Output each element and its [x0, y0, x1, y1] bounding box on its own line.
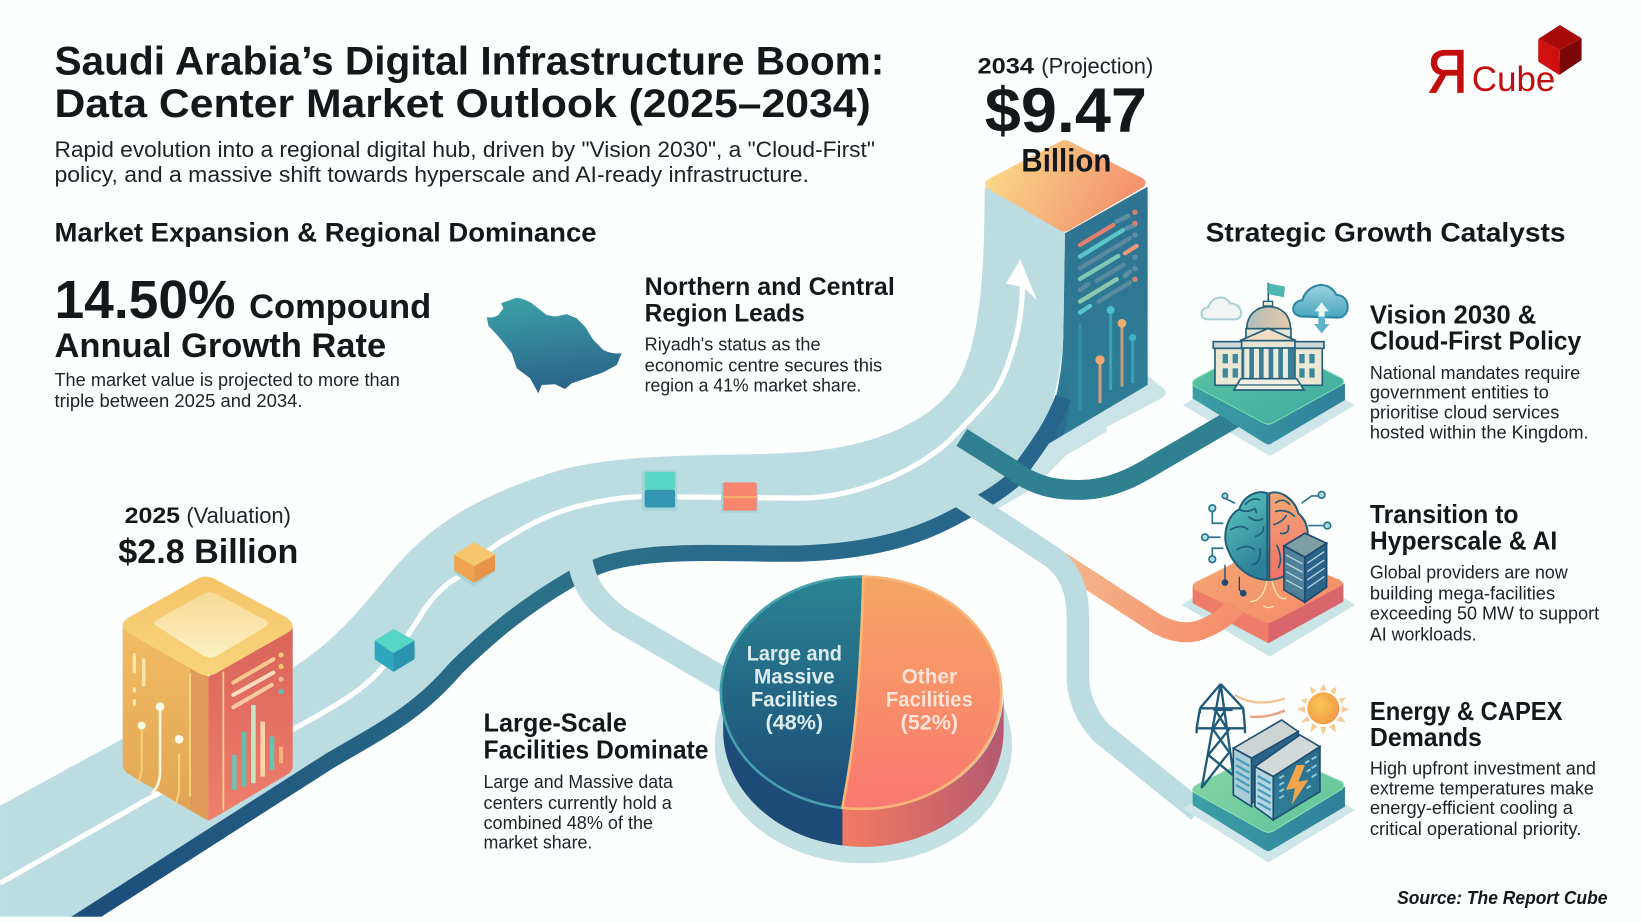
road ribbon beside dark strip	[988, 410, 1107, 508]
text: vision 2030: hosted within the Kingdom.	[1370, 421, 1589, 442]
pie label: other facilities	[886, 665, 973, 734]
text: hyperscale and AI: Transition to	[1370, 499, 1519, 529]
shadow: server tower base	[1013, 375, 1165, 453]
label: 2025 valuation: (Valuation)	[186, 503, 291, 528]
pie label: other facilities: Other	[902, 665, 957, 688]
text: CAGR description: The market value is projected to more than	[54, 369, 400, 390]
callout: northern and central region: economic centre secures this	[645, 355, 882, 376]
pie label: other facilities: (52%)	[901, 711, 958, 734]
text: energy and capex: Demands	[1370, 722, 1482, 752]
label: 2025 valuation: 2025	[125, 503, 180, 528]
label: 2034 projection: (Projection)	[1041, 53, 1153, 78]
text: hyperscale and AI: building mega-facilities	[1370, 583, 1555, 604]
main growth road	[0, 186, 1065, 921]
callout: northern and central region: Riyadh's status as the	[645, 334, 820, 355]
text: hyperscale and AI: AI workloads.	[1370, 623, 1477, 644]
pie label: large and massive: Massive	[754, 665, 835, 688]
arrow: orange link to hyperscale	[1052, 556, 1235, 632]
text: vision 2030: Vision 2030 &	[1370, 299, 1536, 329]
heading: strategic growth catalysts: Strategic Growth Catalysts	[1206, 218, 1566, 248]
pie label: other facilities: Facilities	[886, 688, 973, 711]
text: energy and capex	[1370, 696, 1596, 839]
text: large-scale facilities	[484, 707, 709, 853]
text: vision 2030: prioritise cloud services	[1370, 402, 1559, 423]
text: large-scale facilities: Large and Massive data	[484, 771, 674, 792]
text: energy and capex: critical operational priority.	[1370, 818, 1581, 839]
label: 2034 projection: 2034	[977, 53, 1035, 78]
subtitle	[54, 137, 875, 187]
callout: northern and central region: region a 41% market share.	[645, 374, 861, 395]
title: Saudi Arabia’s Digital Infrastructure Boom:	[54, 38, 884, 83]
cube: flat teal	[642, 470, 677, 511]
text: energy and capex: energy-efficient cooling a	[1370, 797, 1574, 818]
subtitle: policy, and a massive shift towards hyperscale and AI-ready infrastructure.	[54, 162, 809, 187]
text: vision 2030: government entities to	[1370, 382, 1549, 403]
pie halo	[715, 627, 1012, 863]
title	[54, 38, 884, 126]
bottom edge mask	[0, 917, 1641, 923]
label: 2025 valuation	[118, 503, 298, 571]
logo: Cube	[1472, 60, 1555, 99]
road centre line with arrow	[0, 260, 1037, 883]
title: Data Center Market Outlook (2025–2034)	[54, 81, 871, 126]
text: CAGR description	[54, 369, 400, 411]
icon: vision platform and capitol	[1193, 283, 1348, 444]
text: energy and capex: extreme temperatures make	[1370, 777, 1594, 798]
pie chart	[721, 577, 1004, 847]
arrow: teal link to vision	[962, 417, 1237, 490]
text: vision 2030: Cloud-First Policy	[1370, 326, 1582, 356]
road edge: dark strip	[73, 398, 1063, 923]
text: energy and capex: High upfront investment and	[1370, 757, 1596, 778]
source: Source: The Report Cube	[1397, 887, 1607, 908]
pie label: large and massive: Large and	[747, 642, 842, 665]
text: large-scale facilities: combined 48% of the	[484, 812, 653, 833]
icon: hyperscale and AI platform	[1182, 492, 1355, 657]
text: large-scale facilities: Facilities Dominate	[484, 735, 709, 765]
callout: northern and central region: Region Leads	[645, 299, 805, 327]
text: vision 2030: National mandates require	[1370, 362, 1580, 383]
text: vision 2030	[1370, 299, 1589, 442]
server tower 2034	[980, 140, 1148, 453]
text: energy and capex: Energy & CAPEX	[1370, 696, 1563, 726]
cube: amber	[454, 542, 495, 587]
pie label: large and massive	[747, 642, 842, 734]
logo	[1427, 25, 1582, 106]
callout: northern and central region: Northern and Central	[645, 273, 895, 301]
stat: CAGR: Annual Growth Rate	[54, 327, 386, 365]
text: large-scale facilities: market share.	[484, 832, 592, 853]
arrow: link to pie chart	[579, 555, 733, 685]
stat: CAGR: Compound	[249, 288, 431, 326]
pie label: large and massive: (48%)	[766, 711, 823, 734]
text: hyperscale and AI: Hyperscale & AI	[1370, 525, 1557, 555]
label: 2034 projection: $9.47	[985, 76, 1147, 146]
label: 2025 valuation: $2.8 Billion	[118, 533, 298, 571]
stat: CAGR	[54, 271, 431, 365]
label: 2034 projection: Billion	[1021, 143, 1111, 179]
heading: market expansion: Market Expansion & Regional Dominance	[54, 218, 597, 248]
server 2025	[123, 577, 293, 821]
text: hyperscale and AI: Global providers are now	[1370, 562, 1568, 583]
cube: teal	[375, 629, 417, 673]
icon: energy platform, pylon, sun and data halls	[1183, 683, 1355, 863]
callout: northern and central region	[645, 273, 895, 395]
arrow: light link to energy	[948, 489, 1198, 811]
text: CAGR description: triple between 2025 and 2034.	[54, 390, 302, 411]
text: large-scale facilities: Large-Scale	[484, 707, 627, 737]
label: 2034 projection	[977, 53, 1153, 179]
text: hyperscale and AI	[1370, 499, 1599, 644]
text: hyperscale and AI: exceeding 50 MW to support	[1370, 603, 1599, 624]
stat: CAGR: 14.50%	[54, 271, 236, 330]
text: large-scale facilities: centers currently hold a	[484, 792, 673, 813]
shadow: vision platform	[1183, 395, 1355, 456]
logo: Я	[1427, 38, 1468, 106]
subtitle: Rapid evolution into a regional digital hub, driven by "Vision 2030", a "Cloud-First"	[54, 137, 875, 162]
map: Saudi Arabia	[487, 298, 622, 393]
pie label: large and massive: Facilities	[751, 688, 838, 711]
cube: coral	[721, 482, 758, 513]
